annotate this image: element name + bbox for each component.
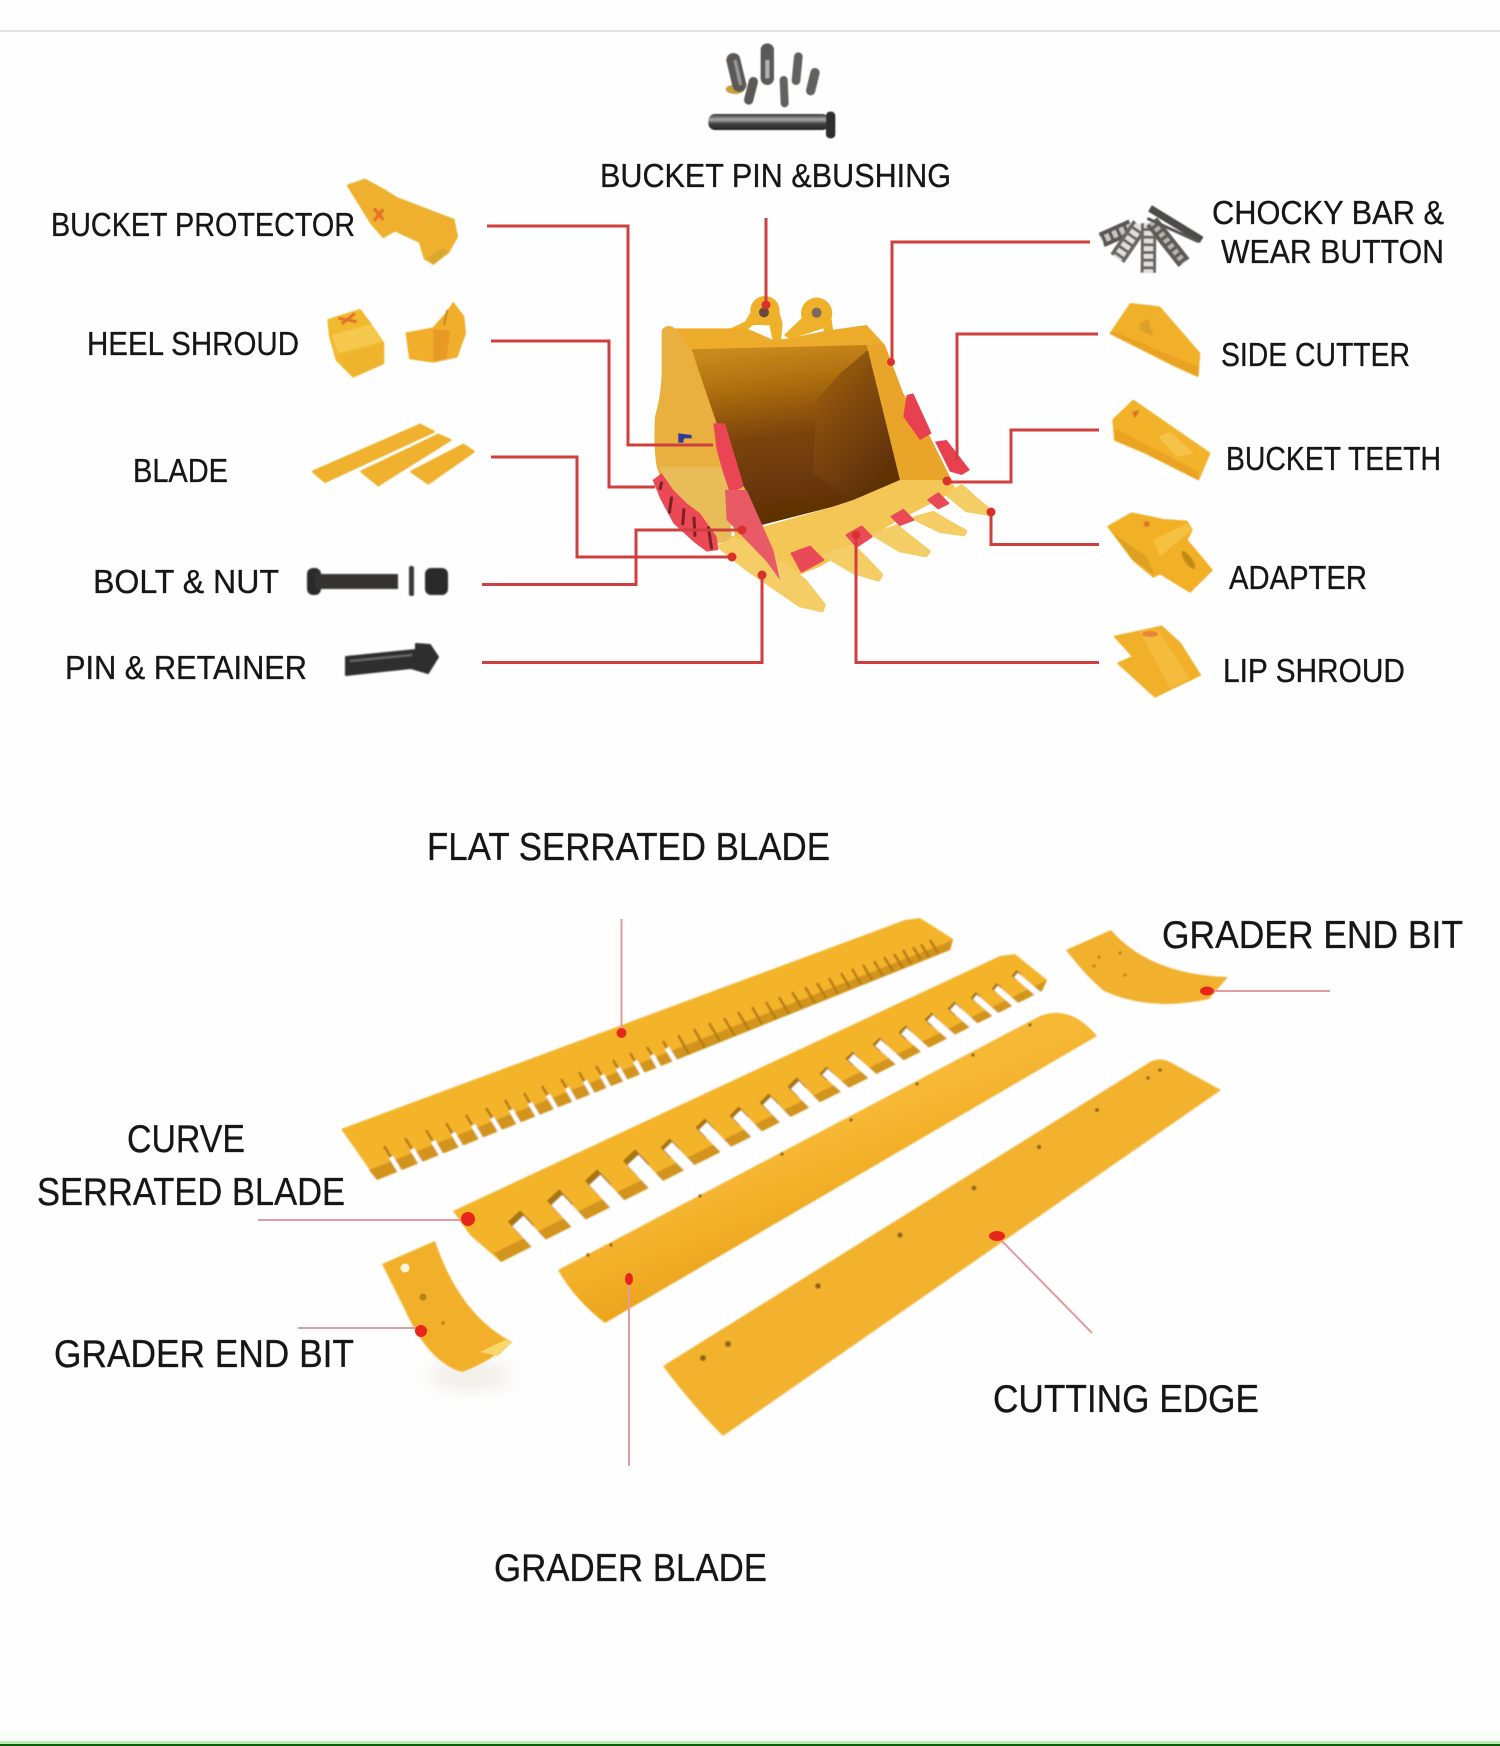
- icon: lip shroud: [1115, 627, 1200, 697]
- bucket lip: [730, 480, 957, 580]
- label: flat serrated blade: FLAT SERRATED BLADE: [427, 826, 830, 869]
- base fill behind lower left edge: [713, 420, 787, 580]
- label: chocky bar and wear button: CHOCKY BAR &: [1212, 194, 1444, 231]
- part: grader end bit left: [382, 1241, 512, 1390]
- icon: chocky bar and wear button: [1102, 208, 1202, 273]
- icon: heel shroud: [328, 303, 465, 377]
- part: cutting edge: [663, 1060, 1221, 1436]
- label: curve serrated blade: CURVE: [127, 1118, 245, 1161]
- label: curve serrated blade: [37, 1118, 345, 1214]
- leader lines: lower diagram: [258, 919, 1330, 1466]
- label: bucket pin and bushing: BUCKET PIN &BUSHING: [600, 157, 951, 194]
- label: grader end bit right: GRADER END BIT: [1162, 914, 1463, 957]
- leader dots: upper diagram: [728, 300, 996, 580]
- part: grader blade: [558, 1013, 1097, 1323]
- interior: [692, 345, 900, 525]
- label: heel shroud: HEEL SHROUD: [87, 325, 299, 362]
- label: lip shroud: LIP SHROUD: [1223, 652, 1405, 689]
- part: curve serrated blade: [453, 954, 1047, 1264]
- icon: bucket pin and bushing: [708, 50, 835, 138]
- lip shrouds: [792, 493, 948, 572]
- label: grader end bit left: GRADER END BIT: [54, 1333, 354, 1376]
- icon: blade: [313, 425, 473, 485]
- left bucket protector: [713, 423, 744, 493]
- icon: pin and retainer: [346, 644, 438, 675]
- label: chocky bar and wear button: [1212, 194, 1444, 270]
- leader lines: upper diagram: [482, 218, 1099, 662]
- label: curve serrated blade: SERRATED BLADE: [37, 1171, 345, 1214]
- left heel shrouds: [653, 473, 718, 552]
- part: flat serrated blade: [341, 918, 953, 1180]
- leader dots: lower diagram: [415, 986, 1214, 1337]
- icon: adapter: [1108, 513, 1212, 592]
- lifting ears: [728, 296, 835, 345]
- label: chocky bar and wear button: WEAR BUTTON: [1221, 233, 1444, 270]
- bottom green edge: [0, 1733, 1500, 1746]
- right side plate: [867, 345, 952, 480]
- label: blade: BLADE: [133, 452, 228, 489]
- icon: bucket protector: [348, 180, 457, 264]
- icon: bolt and nut: [307, 566, 448, 596]
- icon: bucket teeth: [1113, 401, 1209, 480]
- part: grader end bit right: [1066, 930, 1228, 1004]
- label: pin and retainer: PIN & RETAINER: [65, 649, 307, 686]
- label: adapter: ADAPTER: [1229, 559, 1367, 596]
- label: cutting edge: CUTTING EDGE: [993, 1378, 1259, 1421]
- bucket teeth: [720, 487, 991, 610]
- right bucket protector: [903, 393, 932, 440]
- label: bolt and nut: BOLT & NUT: [93, 563, 279, 600]
- label: grader blade: GRADER BLADE: [494, 1547, 767, 1590]
- left side plate: [654, 326, 732, 547]
- illustration: excavator bucket: [653, 296, 991, 610]
- blue logo mark: [678, 433, 692, 443]
- label: bucket protector: BUCKET PROTECTOR: [51, 206, 355, 243]
- label: bucket teeth: BUCKET TEETH: [1226, 440, 1441, 477]
- back rim: [675, 325, 885, 353]
- icon: side cutter: [1111, 304, 1199, 377]
- right side cutter: [935, 440, 970, 475]
- label: side cutter: SIDE CUTTER: [1221, 336, 1410, 373]
- top divider: [0, 30, 1500, 32]
